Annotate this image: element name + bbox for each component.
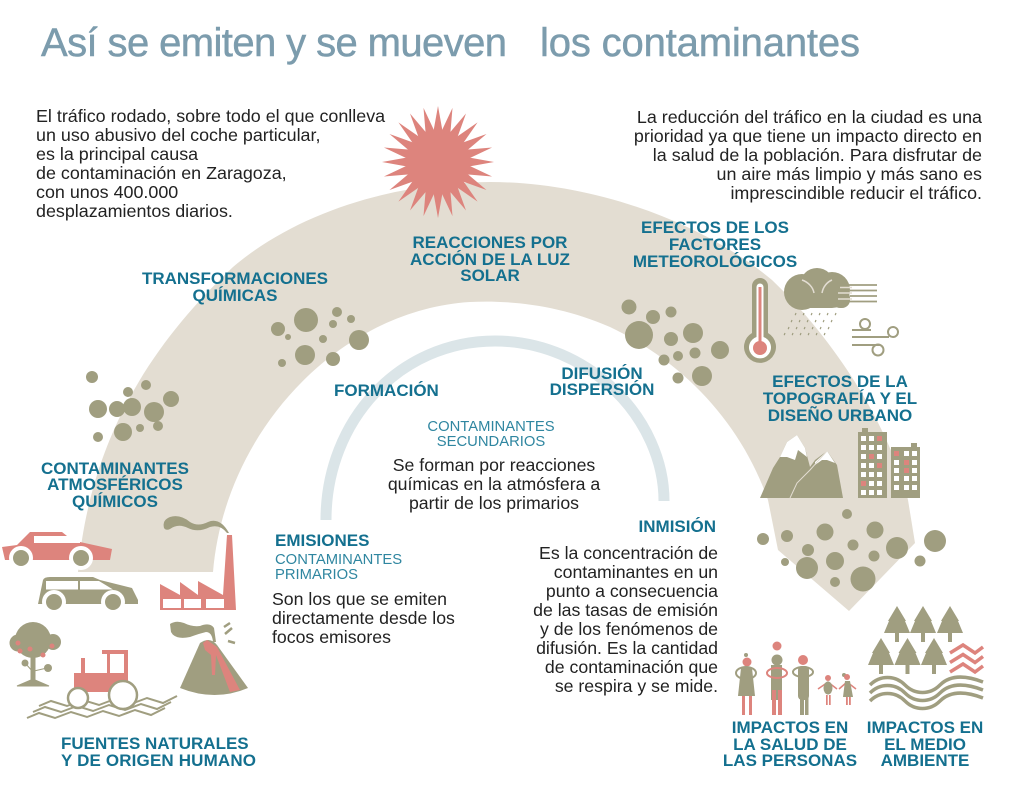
icon: volcano	[170, 622, 248, 695]
particles: diffusion	[622, 300, 729, 386]
icon: buildings	[858, 428, 920, 498]
icon: tree	[10, 622, 61, 686]
heading: efectos topografía: EFECTOS DE LA	[772, 372, 908, 391]
text block: traffic cause: desplazamientos diarios.	[36, 201, 233, 221]
icon: people	[736, 642, 856, 715]
text block: primary pollutants: focos emisores	[272, 627, 391, 647]
text block: traffic reduction: imprescindible reducir el tráfico.	[730, 183, 982, 203]
icon: forest	[868, 606, 963, 674]
heading: emisiones: EMISIONES	[275, 531, 369, 550]
heading: reacciones: ACCIÓN DE LA LUZ	[410, 250, 570, 269]
heading: fuentes: FUENTES NATURALES	[61, 734, 249, 753]
icon: red car	[2, 532, 112, 570]
icon: cloud with rain	[784, 268, 877, 335]
text block: primary pollutants: directamente desde los	[272, 608, 455, 628]
heading: reacciones: SOLAR	[460, 266, 520, 285]
text block: traffic reduction: un aire más limpio y más sano es	[716, 164, 982, 184]
text block: traffic cause: de contaminación en Zaragoza,	[36, 163, 287, 183]
text block: traffic reduction: la salud de la población. Para disfrutar de	[653, 145, 982, 165]
text block: inmisión: punto a consecuencia	[546, 581, 718, 601]
text block: inmisión: y de los fenómenos de	[540, 619, 718, 639]
particles: lower right	[757, 509, 946, 592]
heading: impactos salud: IMPACTOS EN	[732, 718, 848, 737]
text block: traffic cause: con unos 400.000	[36, 182, 178, 202]
text block: inmisión: contaminantes en un	[554, 562, 718, 582]
subheading: contaminantes primarios: CONTAMINANTES	[275, 552, 402, 568]
text block: inmisión: de las tasas de emisión	[533, 600, 718, 620]
heading: efectos meteorológicos: METEOROLÓGICOS	[633, 252, 797, 271]
particles: atmospheric chemicals	[86, 371, 179, 442]
heading: impactos salud: LAS PERSONAS	[723, 751, 857, 770]
heading: contaminantes atmosféricos: CONTAMINANTES	[41, 459, 189, 478]
heading: contaminantes atmosféricos: ATMOSFÉRICOS	[47, 475, 183, 494]
text block: inmisión: se respira y se mide.	[555, 676, 718, 696]
icon: factory	[160, 516, 236, 610]
text block: traffic reduction: prioridad ya que tiene un impacto directo en	[634, 126, 982, 146]
heading: formación: FORMACIÓN	[334, 381, 439, 400]
text block: inmisión: Es la concentración de	[539, 543, 718, 563]
subheading: contaminantes secundarios: CONTAMINANTES	[427, 419, 555, 435]
heading: efectos topografía: TOPOGRAFÍA Y EL	[763, 389, 917, 408]
heading: difusión dispersión: DIFUSIÓN	[561, 364, 643, 383]
text block: secondary pollutants: químicas en la atmósfera a	[388, 474, 600, 494]
text block: secondary pollutants: partir de los primarios	[409, 493, 579, 513]
title: Así se emiten y se mueven	[41, 21, 507, 65]
icon: red zigzag air	[950, 645, 983, 672]
text block: primary pollutants: Son los que se emiten	[272, 589, 447, 609]
icon: mountains	[760, 435, 843, 498]
heading: contaminantes atmosféricos: QUÍMICOS	[72, 492, 158, 511]
text block: secondary pollutants: Se forman por reacciones	[393, 455, 595, 475]
beige arch band	[78, 182, 915, 611]
heading: impactos salud: LA SALUD DE	[733, 735, 847, 754]
text block: traffic cause: un uso abusivo del coche particular,	[36, 125, 320, 145]
text block: traffic reduction: La reducción del tráfico en la ciudad es una	[637, 107, 982, 127]
text block: inmisión: difusión. Es la cantidad	[536, 638, 718, 658]
heading: impactos medio ambiente: IMPACTOS EN	[867, 718, 983, 737]
light blue inner arc	[326, 341, 664, 520]
text block: inmisión: de contaminación que	[545, 657, 718, 677]
title	[41, 21, 860, 65]
heading: transformaciones: QUÍMICAS	[192, 286, 278, 305]
heading: reacciones: REACCIONES POR	[413, 233, 567, 252]
icon: thermometer	[744, 278, 776, 363]
text block: traffic cause: El tráfico rodado, sobre todo el que conlleva	[36, 106, 385, 126]
icon: tractor and field	[27, 650, 177, 718]
heading: fuentes: Y DE ORIGEN HUMANO	[61, 751, 256, 770]
title: los contaminantes	[540, 21, 860, 65]
icon: water waves	[870, 677, 983, 708]
subheading: contaminantes primarios: PRIMARIOS	[275, 567, 358, 583]
heading: impactos medio ambiente: AMBIENTE	[881, 751, 969, 770]
heading: transformaciones: TRANSFORMACIONES	[142, 269, 328, 288]
icon: sun	[382, 106, 494, 218]
heading: difusión dispersión: DISPERSIÓN	[550, 380, 654, 399]
heading: efectos meteorológicos: FACTORES	[669, 235, 761, 254]
icon: wind	[852, 319, 898, 356]
particles: chemical transformations	[271, 307, 369, 367]
text block: traffic cause: es la principal causa	[36, 144, 198, 164]
heading: efectos topografía: DISEÑO URBANO	[768, 405, 912, 425]
heading: inmisión: INMISIÓN	[639, 517, 716, 536]
icon: olive car	[38, 577, 138, 614]
heading: impactos medio ambiente: EL MEDIO	[884, 735, 966, 754]
subheading: contaminantes secundarios: SECUNDARIOS	[437, 434, 545, 450]
heading: efectos meteorológicos: EFECTOS DE LOS	[641, 218, 789, 237]
